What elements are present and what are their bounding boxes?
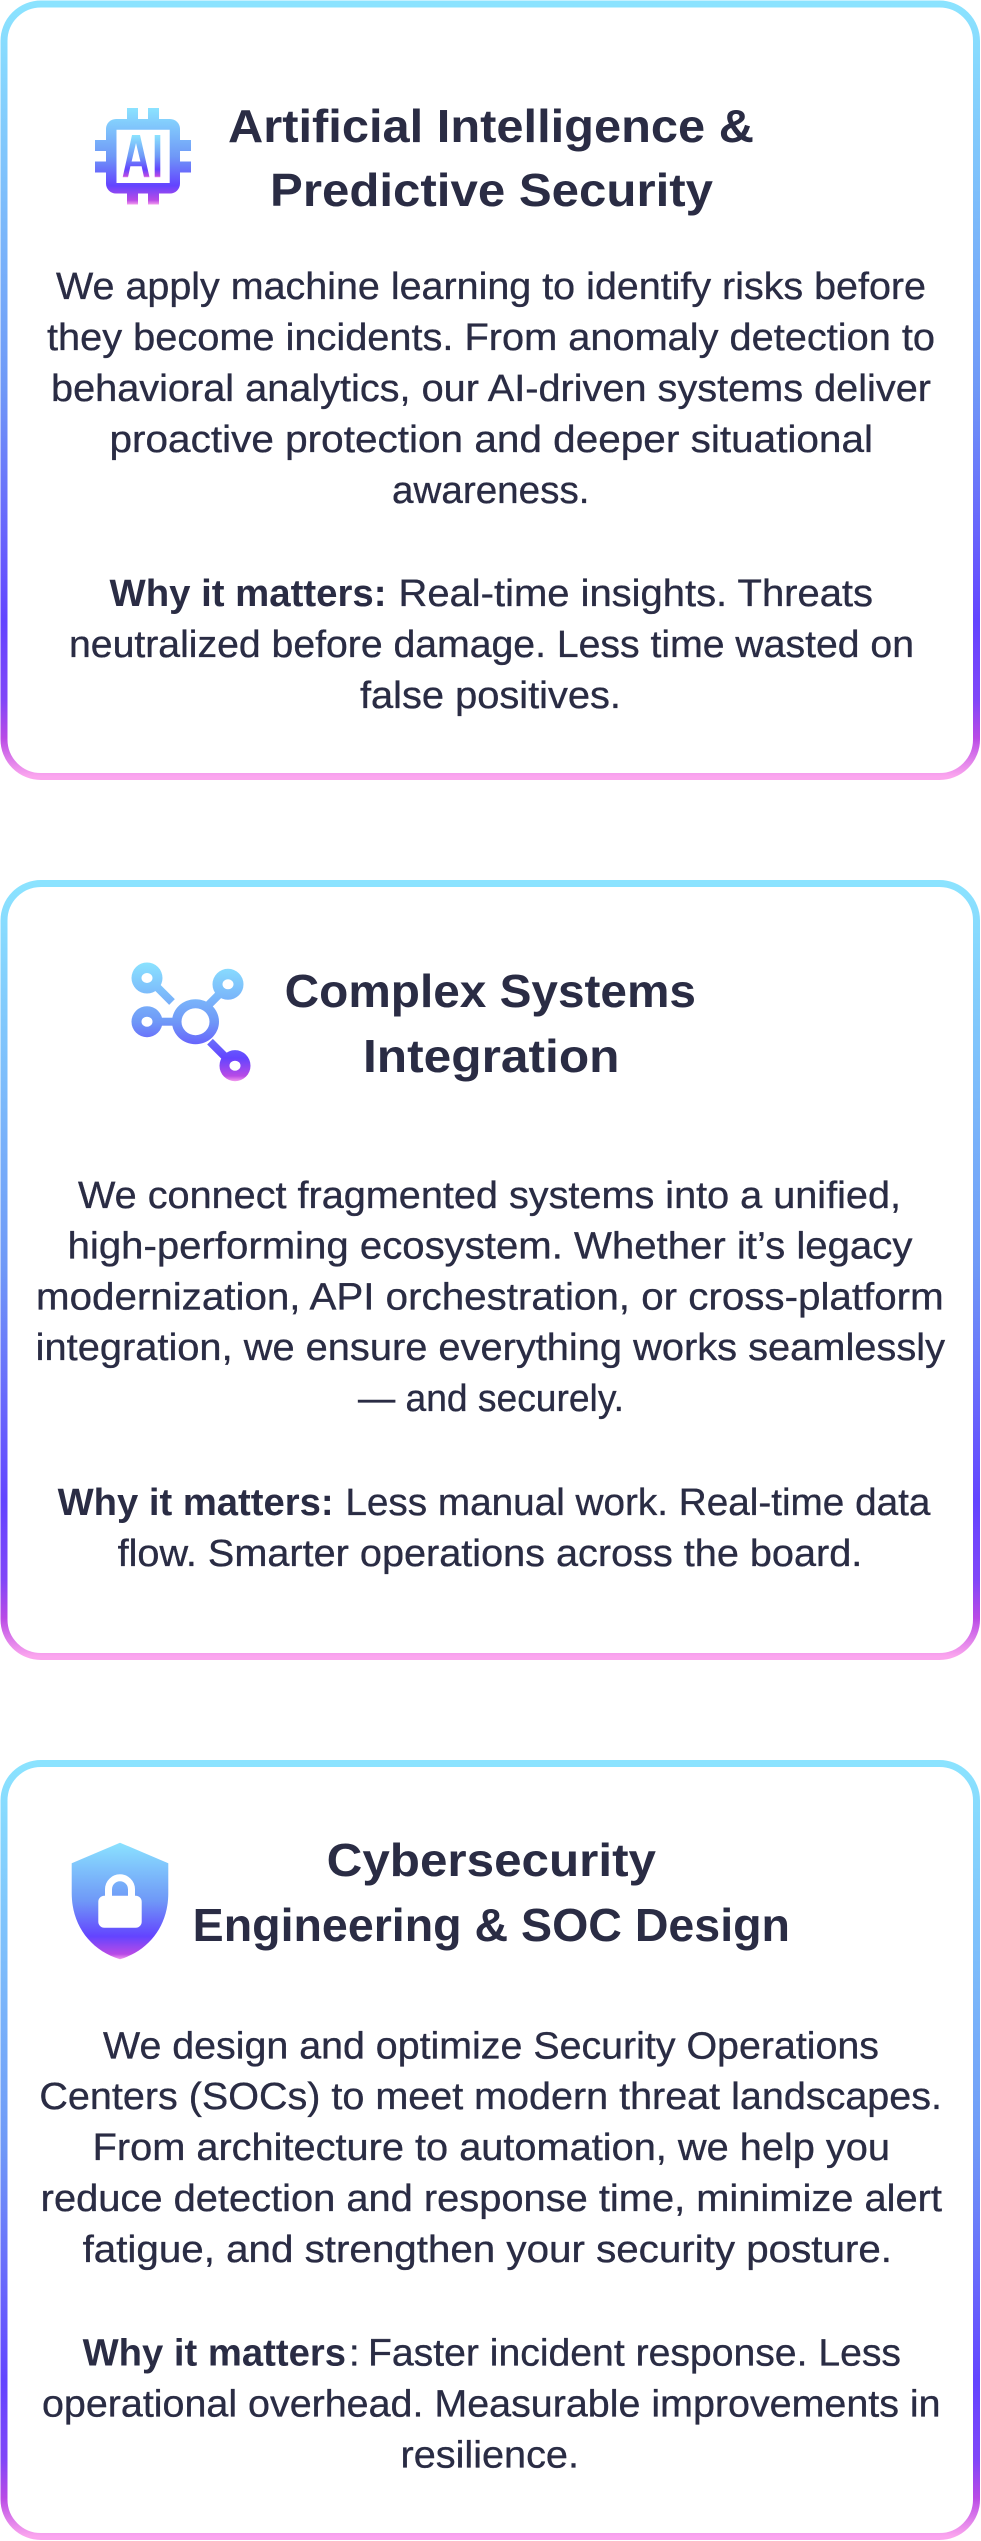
heading: Integration — [363, 1030, 620, 1082]
body text: We design and optimize Security Operations — [103, 2026, 879, 2068]
card border — [4, 4, 976, 776]
why it matters text: Faster incident response. Less — [368, 2332, 901, 2374]
heading — [285, 965, 696, 1082]
body text — [39, 2026, 942, 2271]
body text: fatigue, and strengthen your security posture. — [83, 2229, 892, 2271]
why it matters text: neutralized before damage. Less time wasted on — [69, 624, 914, 666]
why it matters text — [58, 1482, 931, 1575]
panel: Complex Systems Integration — [4, 884, 976, 1656]
body text: reduce detection and response time, minimize alert — [41, 2178, 942, 2220]
panel: Artificial Intelligence & Predictive Security — [4, 4, 976, 776]
icon: network nodes — [132, 962, 251, 1081]
why it matters text: resilience. — [400, 2434, 579, 2476]
why it matters text: : — [349, 2332, 360, 2374]
why it matters text: Why it matters: — [58, 1482, 334, 1524]
body text: — and securely. — [358, 1378, 624, 1420]
body text: awareness. — [392, 470, 590, 512]
panel: Cybersecurity Engineering & SOC Design — [4, 1764, 976, 2536]
why it matters text: Less manual work. Real-time data — [345, 1482, 931, 1524]
body text: high-performing ecosystem. Whether it’s legacy — [68, 1226, 912, 1268]
heading: Cybersecurity — [327, 1834, 656, 1886]
why it matters text — [69, 573, 914, 717]
body text: integration, we ensure everything works seamlessly — [36, 1327, 945, 1369]
body text: proactive protection and deeper situational — [110, 419, 873, 461]
card border — [4, 1764, 976, 2536]
body text — [36, 1175, 945, 1420]
body text: We apply machine learning to identify risks before — [56, 266, 926, 308]
icon: AI chip — [95, 108, 191, 204]
why it matters text: Real-time insights. Threats — [398, 573, 873, 615]
why it matters text: Why it matters: — [110, 573, 386, 615]
body text: they become incidents. From anomaly detection to — [47, 317, 935, 359]
heading: Artificial Intelligence & — [228, 100, 754, 152]
icon: shield with padlock — [72, 1843, 168, 1959]
card border — [4, 884, 976, 1656]
body text: Centers (SOCs) to meet modern threat landscapes. — [39, 2076, 942, 2118]
why it matters text — [42, 2332, 941, 2476]
heading: Predictive Security — [270, 164, 713, 216]
heading — [228, 100, 754, 216]
body text: From architecture to automation, we help you — [93, 2127, 890, 2169]
heading: Complex Systems — [285, 965, 696, 1017]
why it matters text: flow. Smarter operations across the board. — [118, 1533, 862, 1575]
heading — [193, 1834, 790, 1951]
body text: modernization, API orchestration, or cross-platform — [36, 1276, 944, 1318]
body text: behavioral analytics, our AI-driven systems deliver — [51, 368, 931, 410]
why it matters text: Why it matters — [83, 2332, 346, 2374]
body text: We connect fragmented systems into a unified, — [78, 1175, 901, 1217]
body text — [47, 266, 935, 512]
heading: Engineering & SOC Design — [193, 1899, 790, 1951]
why it matters text: operational overhead. Measurable improvements in — [42, 2384, 941, 2426]
why it matters text: false positives. — [360, 675, 621, 717]
